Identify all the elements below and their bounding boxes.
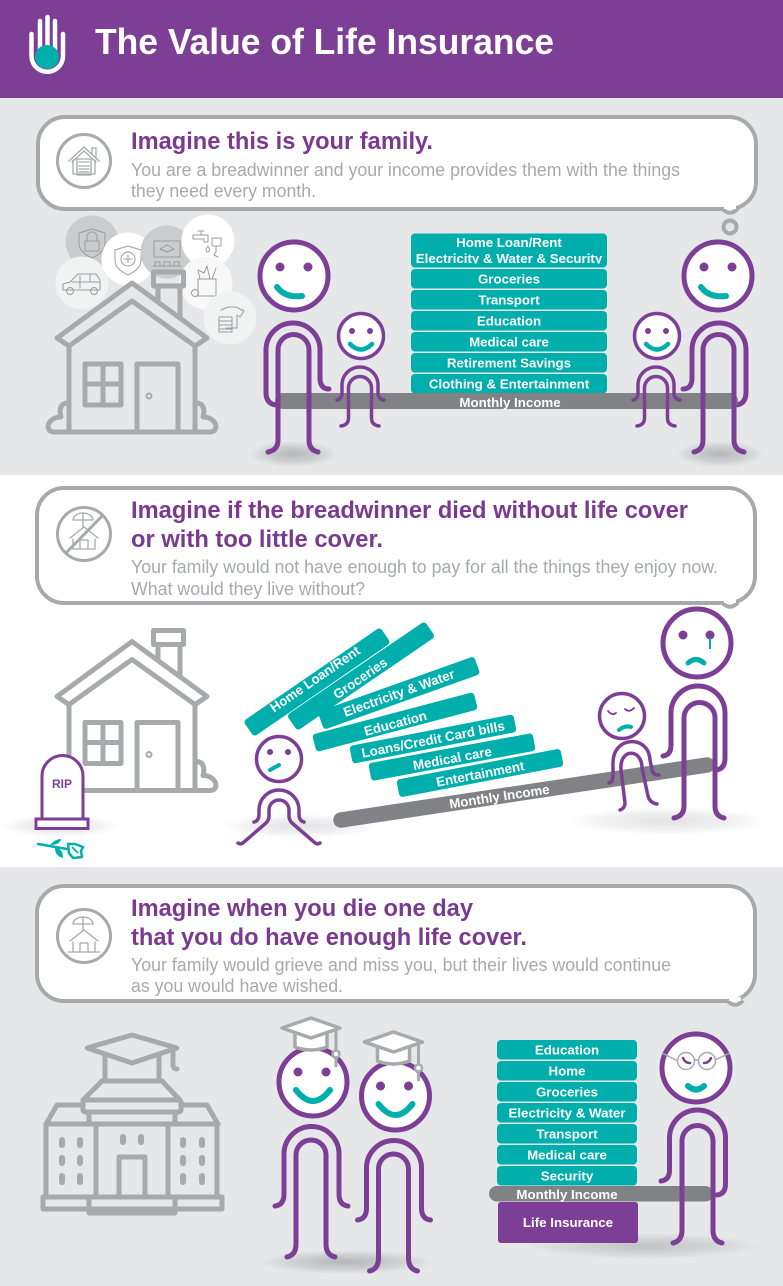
adult legs: [268, 334, 744, 452]
Transport bar: [411, 290, 607, 310]
illustration: house: [48, 272, 216, 432]
Groceries bar: Groceries: [478, 272, 540, 286]
Home Loan and Electricity bar: Home Loan/Rent: [456, 235, 562, 250]
Loans and Credit Card bar: Loans/Credit Card bills: [360, 718, 506, 761]
Security bar: [497, 1166, 637, 1186]
Groceries bar: Groceries: [330, 655, 390, 702]
panel: enough life cover: [37, 886, 763, 1274]
body text: [131, 557, 718, 599]
shadows under adults: [249, 441, 764, 467]
heading: [131, 497, 688, 553]
icon: security lock: [66, 216, 118, 268]
icon: house crossed out: [58, 508, 110, 560]
Education bar: Education: [362, 708, 428, 739]
right child figure: [633, 314, 680, 426]
Groceries bar: [411, 269, 607, 288]
Groceries bar: [287, 621, 435, 731]
Entertainment bar: [396, 749, 564, 797]
body text: Your family would grieve and miss you, but their lives would continue: [131, 955, 671, 975]
icon: protected house: [58, 910, 110, 962]
illustration: house: [50, 630, 216, 790]
Groceries bar: Groceries: [536, 1084, 598, 1100]
sad breadwinner adult: [663, 609, 731, 770]
icon: house with calculator: [58, 134, 110, 188]
Retirement Savings bar: [411, 353, 607, 372]
Education bar: [497, 1040, 637, 1060]
Medical care bar: [497, 1145, 637, 1164]
falling expense bars: [242, 621, 564, 797]
icon: water and electricity: [182, 214, 234, 268]
Education bar: Education: [477, 314, 541, 328]
body text: [131, 955, 671, 996]
left adult figure: [260, 242, 329, 405]
body text: What would they live without?: [131, 579, 365, 599]
Security bar: Security: [541, 1168, 594, 1184]
Clothing and Entertainment bar: Clothing & Entertainment: [429, 376, 590, 392]
body text: they need every month.: [131, 181, 316, 201]
expense bubbles: [56, 214, 256, 344]
Life Insurance block: Life Insurance: [523, 1215, 613, 1230]
Transport bar: Transport: [478, 292, 540, 308]
Electricity and Water bar: [497, 1103, 637, 1122]
body text: Your family would not have enough to pay for all the things they enjoy now.: [131, 557, 718, 577]
tilted monthly income bar: [341, 765, 707, 820]
heading: that you do have enough life cover.: [131, 924, 527, 951]
Entertainment bar: Entertainment: [435, 758, 526, 790]
adult legs: [673, 1126, 722, 1243]
Transport bar: Transport: [536, 1126, 598, 1142]
right adult figure: [683, 242, 752, 405]
icon: car: [56, 256, 108, 310]
Retirement Savings bar: Retirement Savings: [447, 356, 571, 370]
icon: hand logo: [32, 17, 63, 72]
Home bar: [497, 1061, 637, 1080]
speech bubble 3: [37, 886, 755, 1005]
heading: Imagine when you die one day: [131, 895, 474, 922]
speech bubble 1: [38, 117, 756, 234]
icon: clothing: [204, 292, 256, 344]
shadow under graduates: [259, 1250, 435, 1274]
Clothing and Entertainment bar: [411, 374, 607, 394]
ground shadows: [0, 807, 768, 838]
body text: You are a breadwinner and your income provides them with the things: [131, 160, 680, 180]
heading: or with too little cover.: [131, 526, 383, 553]
icon: medical shield: [102, 232, 154, 286]
heading: Imagine this is your family.: [131, 128, 433, 155]
Medical care bar: Medical care: [412, 744, 493, 773]
Transport bar: [497, 1124, 637, 1144]
icon: rose: [38, 839, 83, 858]
shadow under grandparent: [527, 1233, 763, 1259]
Education bar: [312, 692, 478, 752]
icon: RIP tombstone: [36, 755, 88, 828]
body text: as you would have wished.: [131, 976, 343, 996]
heading: [131, 895, 527, 951]
icon: groceries bag: [180, 256, 232, 310]
Medical care bar: [411, 332, 607, 352]
Electricity and Water bar: Electricity & Water: [341, 666, 457, 720]
illustration: university building: [43, 1035, 222, 1213]
body text: [131, 160, 680, 201]
title: The Value of Life Insurance: [95, 21, 554, 62]
left child figure: [337, 314, 384, 426]
Home Loan bar: [242, 626, 391, 737]
tilted monthly income bar: Monthly Income: [448, 782, 550, 811]
icon: classroom: [140, 226, 194, 278]
monthly income bar: [275, 393, 738, 410]
sad adult legs: [674, 702, 724, 818]
graduate figure two: [358, 1032, 430, 1271]
monthly income bar: [489, 1186, 713, 1202]
adult with glasses: [661, 1034, 730, 1195]
expense stack with life insurance: [497, 1040, 638, 1243]
small child knocked down: [238, 736, 320, 844]
Electricity and Water bar: Electricity & Water: [508, 1106, 626, 1120]
sad child on bar: [600, 694, 659, 810]
speech bubble 2: [37, 488, 755, 607]
Home Loan and Electricity bar: [411, 234, 607, 268]
Life Insurance block: [498, 1202, 638, 1243]
heading: Imagine if the breadwinner died without life cover: [131, 497, 688, 524]
Medical care bar: [368, 733, 536, 781]
graduate figure one: [275, 1018, 348, 1257]
monthly income bar: Monthly Income: [516, 1187, 618, 1202]
Home Loan bar: Home Loan/Rent: [267, 643, 363, 715]
monthly expense stack: [411, 234, 607, 394]
Medical care bar: Medical care: [469, 334, 549, 350]
icon: RIP tombstone: RIP: [52, 777, 72, 791]
Education bar: [411, 311, 607, 330]
Medical care bar: Medical care: [527, 1148, 607, 1162]
Home Loan and Electricity bar: Electricity & Water & Security: [416, 251, 603, 266]
monthly income bar: Monthly Income: [459, 395, 561, 410]
Groceries bar: [497, 1082, 637, 1102]
Education bar: Education: [535, 1042, 599, 1058]
panel: imagine this is your family: [38, 117, 764, 467]
Home bar: Home: [549, 1064, 585, 1078]
Electricity and Water bar: [318, 656, 480, 730]
panel: died without life cover: [0, 488, 768, 858]
header banner: [0, 0, 783, 98]
